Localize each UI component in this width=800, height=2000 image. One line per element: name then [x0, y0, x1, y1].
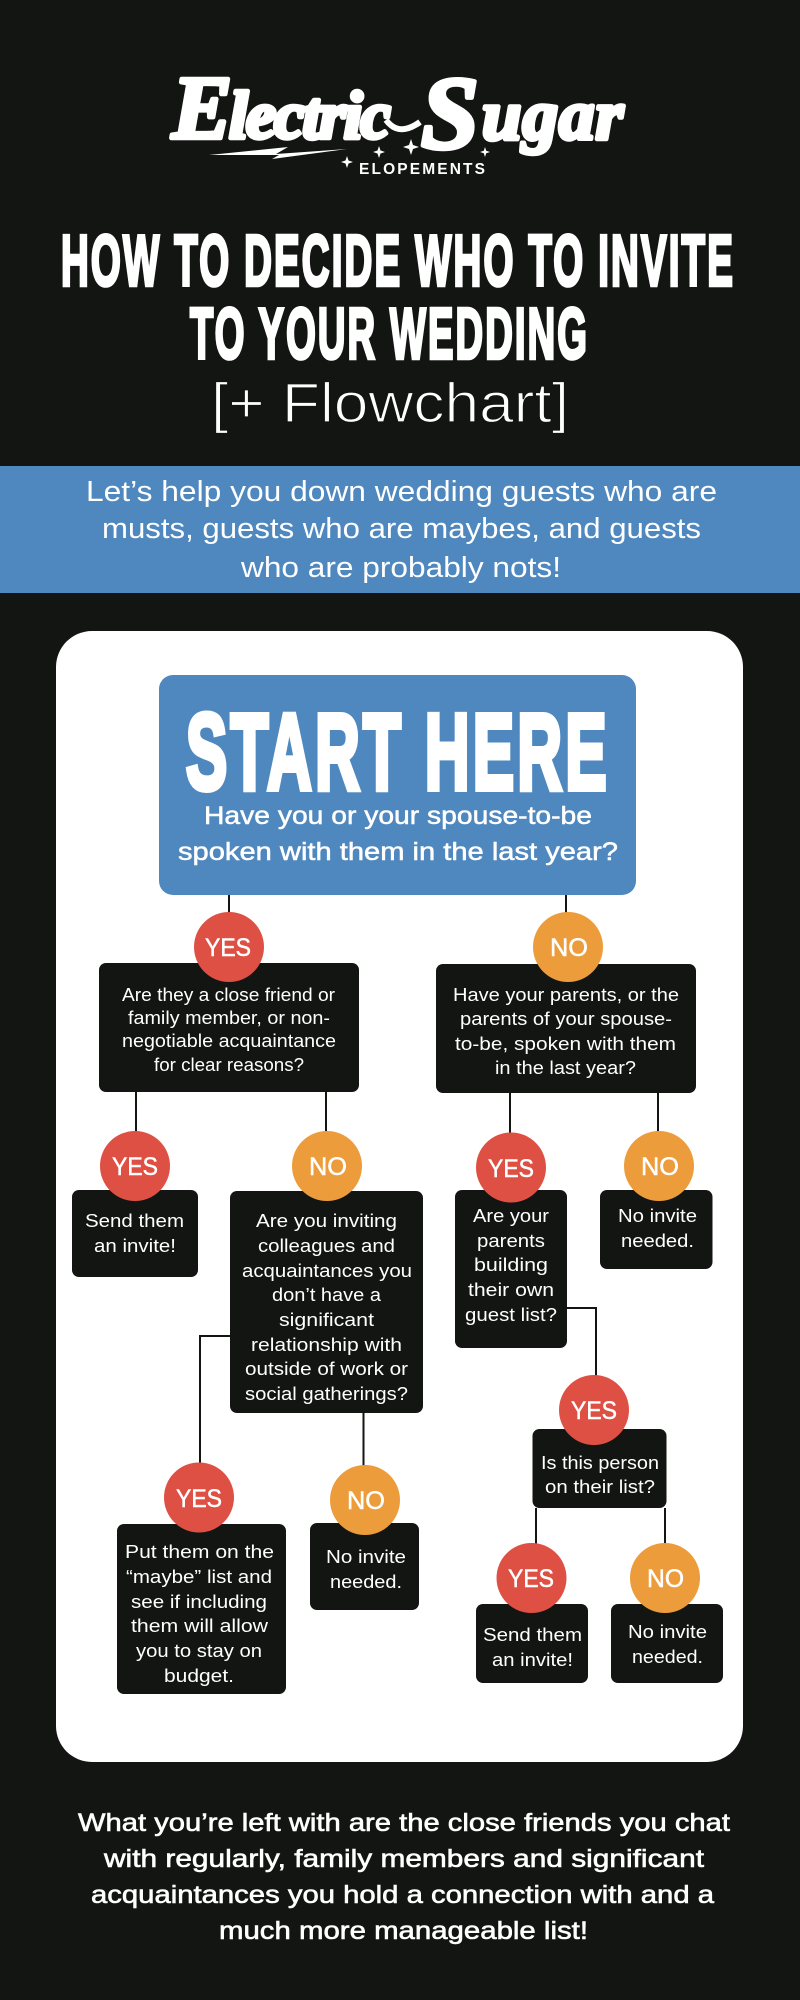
badge: yes: [476, 1132, 546, 1202]
intro banner: who are probably nots!: [240, 552, 561, 584]
badge: no: NO: [550, 934, 588, 962]
outcome: send them an invite: [72, 1190, 198, 1277]
outcome: no invite needed: No invite: [326, 1546, 406, 1567]
outcome: no invite needed: needed.: [330, 1571, 402, 1592]
outcome: no invite needed: No invite: [628, 1621, 707, 1642]
question: parents building guest list: parents: [477, 1230, 545, 1251]
logo: Electric Sugar Elopements: [171, 56, 624, 178]
question: colleagues and acquaintances: [230, 1191, 423, 1413]
outcome: send them an invite: an invite!: [94, 1235, 176, 1256]
outcome: maybe list: budget.: [164, 1665, 234, 1686]
intro banner: [0, 466, 800, 593]
question: colleagues and acquaintances: outside of work or: [245, 1358, 408, 1379]
start box: spoken with them in the last year?: [178, 838, 618, 866]
badge: no: NO: [647, 1565, 684, 1593]
question: close friend or family: Are they a close friend or: [122, 984, 335, 1005]
question: close friend or family: negotiable acquaintance: [122, 1030, 336, 1051]
logo: Electric Sugar Elopements: lectric: [229, 77, 391, 153]
badge: yes: YES: [112, 1153, 158, 1181]
question: colleagues and acquaintances: significant: [279, 1309, 374, 1330]
logo: Electric Sugar Elopements: ugar: [482, 77, 624, 155]
logo: Electric Sugar Elopements: S: [421, 56, 479, 171]
outcome: maybe list: [117, 1524, 286, 1694]
outcome: maybe list: you to stay on: [136, 1640, 262, 1661]
badge: yes: YES: [488, 1155, 534, 1183]
question: close friend or family: family member, or non-: [128, 1007, 330, 1028]
intro banner: Let’s help you down wedding guests who are: [86, 476, 717, 508]
badge: yes: [100, 1131, 170, 1201]
panel: flowchart: [56, 631, 743, 1762]
badge: no: [533, 912, 603, 982]
badge: yes: YES: [205, 934, 251, 962]
outcome: send them an invite: Send them: [483, 1624, 582, 1645]
outcome: send them an invite: Send them: [85, 1210, 184, 1231]
badge: no: NO: [309, 1153, 347, 1181]
closing text: much more manageable list!: [219, 1917, 588, 1945]
badge: yes: YES: [176, 1485, 222, 1513]
closing text: with regularly, family members and significant: [103, 1845, 704, 1873]
outcome: maybe list: see if including: [131, 1591, 267, 1612]
question: is this person on their list: on their list?: [545, 1476, 655, 1497]
badge: no: [292, 1131, 362, 1201]
question: parents building guest list: Are your: [473, 1205, 549, 1226]
outcome: no invite needed: [600, 1190, 712, 1269]
question: parents building guest list: building: [474, 1254, 548, 1275]
outcome: send them an invite: an invite!: [492, 1649, 573, 1670]
outcome: send them an invite: [476, 1604, 588, 1683]
badge: yes: [194, 912, 264, 982]
badge: no: [630, 1543, 700, 1613]
intro banner: musts, guests who are maybes, and guests: [102, 513, 701, 545]
closing text: What you’re left with are the close friends you chat: [78, 1809, 730, 1837]
question: is this person on their list: [532, 1429, 666, 1508]
closing text: [78, 1809, 730, 1945]
badge: yes: [559, 1375, 629, 1445]
question: parents spoken with them: in the last year?: [495, 1057, 636, 1078]
outcome: maybe list: them will allow: [131, 1615, 269, 1636]
badge: yes: YES: [571, 1397, 617, 1425]
badge: yes: [496, 1543, 566, 1613]
question: close friend or family: [99, 963, 359, 1092]
logo: Electric Sugar Elopements: ELOPEMENTS: [359, 161, 485, 178]
badge: yes: [164, 1462, 234, 1532]
outcome: no invite needed: needed.: [632, 1646, 703, 1667]
question: parents spoken with them: [436, 964, 696, 1093]
question: colleagues and acquaintances: relationship with: [251, 1334, 402, 1355]
badge: yes: YES: [508, 1565, 554, 1593]
badge: no: NO: [641, 1153, 679, 1181]
question: colleagues and acquaintances: colleagues and: [258, 1235, 395, 1256]
start box: [159, 675, 636, 895]
question: colleagues and acquaintances: don’t have a: [272, 1284, 382, 1305]
title: [+ Flowchart]: [211, 371, 569, 434]
outcome: no invite needed: [611, 1604, 723, 1683]
outcome: maybe list: Put them on the: [125, 1541, 274, 1562]
closing text: acquaintances you hold a connection with and a: [91, 1881, 714, 1909]
outcome: no invite needed: needed.: [621, 1230, 694, 1251]
question: parents building guest list: [455, 1190, 567, 1348]
connectors: [136, 895, 665, 1545]
outcome: no invite needed: [310, 1523, 419, 1610]
question: parents spoken with them: to-be, spoken with them: [455, 1033, 676, 1054]
badge: no: [624, 1131, 694, 1201]
question: colleagues and acquaintances: acquaintances you: [242, 1260, 412, 1281]
title: [61, 222, 735, 434]
outcome: maybe list: “maybe” list and: [126, 1566, 272, 1587]
question: colleagues and acquaintances: social gatherings?: [245, 1383, 408, 1404]
question: colleagues and acquaintances: Are you inviting: [256, 1210, 397, 1231]
question: close friend or family: for clear reasons?: [154, 1054, 304, 1075]
outcome: no invite needed: No invite: [618, 1205, 697, 1226]
question: parents building guest list: their own: [468, 1279, 554, 1300]
question: parents building guest list: guest list?: [465, 1304, 557, 1325]
question: parents spoken with them: parents of your spouse-: [460, 1008, 672, 1029]
question: parents spoken with them: Have your parents, or the: [453, 984, 679, 1005]
start box: Have you or your spouse-to-be: [204, 802, 592, 830]
badge: no: NO: [347, 1487, 385, 1515]
badge: no: [330, 1465, 400, 1535]
logo: Electric Sugar Elopements: E: [171, 59, 232, 158]
question: is this person on their list: Is this person: [541, 1452, 659, 1473]
